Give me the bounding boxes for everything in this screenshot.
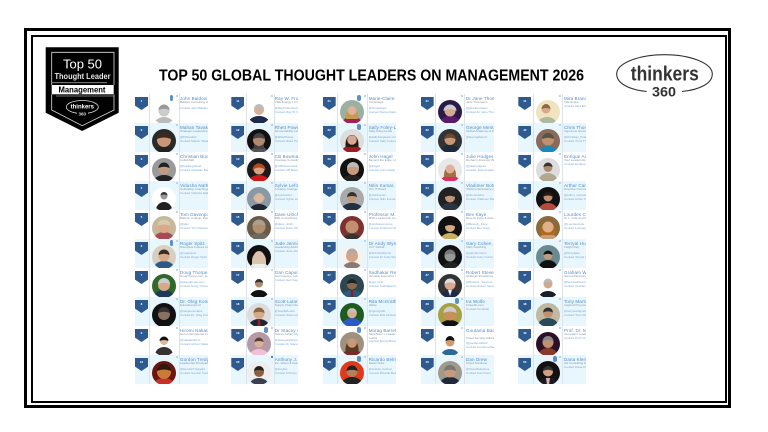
row: Sylvie Lefoir: 14 [236, 186, 239, 190]
row: Morag Barrett: Author [369, 336, 378, 340]
row: Scott Luton: 18 [236, 302, 239, 306]
row: Gordon Tredgold: @GordonTredgold [180, 367, 205, 371]
row: Dave Ulrich [231, 210, 298, 239]
column 1: ranks 1 to 10 [135, 94, 208, 384]
row: Dave Ulrich: @dave_ulrich [275, 222, 293, 226]
row: Mahan Tavakoli: @MTavakoli [180, 135, 196, 139]
row: Roger Spitz [135, 239, 208, 268]
row: Dr Jane Thomason: 31 [426, 99, 429, 103]
row: Rhett Power: @RhettPower [275, 135, 294, 139]
row: Doug Thorpe [135, 268, 208, 297]
row: Arthur Carmazzi [518, 181, 586, 210]
row: Morag Barrett [323, 326, 396, 355]
row: Anthony J. (Tony) Fox: 20 [236, 360, 239, 364]
row: Terryal Hu: @TerryalHu [564, 251, 580, 255]
row: Mira Brancu: Tiderscape [564, 100, 579, 104]
row: Mahan Tavakoli [135, 123, 208, 152]
row: Mahan Tavakoli: 2 [141, 128, 142, 132]
row: George Mentz [421, 123, 494, 152]
row: Sally Foley-Lewis [323, 123, 396, 152]
row: Dr. Oleg Konovalov [135, 297, 208, 326]
row: Roger Spitz: @rogerspitz [180, 251, 196, 255]
row: Christian Buckley: CollabTalk [180, 158, 194, 162]
row: Vidusha Nathavitharana: 4 [141, 186, 142, 190]
row: Ricardo Belmar: @ricardo_belmar [369, 367, 392, 371]
row: Gary Cohen: @garyburnison [466, 251, 486, 255]
row: Nitin Kumar, CFA: @nitinkumar [369, 193, 386, 197]
row: Sally Foley-Lewis: Sally Foley-Lewis [369, 129, 392, 133]
row: Sylvie Lefoir: @sylvielefoir [275, 193, 292, 197]
row: Enrique Accorsi: 43 [523, 157, 526, 161]
row: Ira Wolfe [421, 297, 494, 326]
column 2: ranks 11 to 20 [231, 94, 298, 384]
row: Doug Thorpe: 7 [141, 273, 142, 277]
row: Dan Drew [421, 355, 494, 384]
row: Rita McGrath: 28 [328, 302, 331, 306]
row: Ira Wolfe: LinkedIn.com [466, 303, 484, 307]
row: Ira Wolfe: 38 [426, 302, 429, 306]
row: Gari Capone: 17 [236, 273, 239, 277]
row: Ray W. Frohnhoefer: VRE Energy LLC [275, 100, 298, 104]
row: Nitin Kumar, CFA: The IT Board [369, 187, 386, 191]
row: Robert Stevens: @RobertL_Stevens [466, 280, 492, 284]
row: Dr. Oleg Konovalov: Educational Ltd [180, 303, 201, 307]
row: Rhett Power: 12 [236, 128, 239, 132]
row: Nitin Kumar, CFA [323, 181, 396, 210]
row: Gordon Tredgold: 10 [140, 360, 143, 364]
row: George Mentz: @GeorgeMentz [466, 135, 487, 139]
row: Julie Hodges: Contact Julie Hodges [466, 168, 494, 172]
row: Bev Kaye [421, 210, 494, 239]
row: John Hagel: John Hagel [369, 154, 393, 159]
row: John Hagel: Contact John Hagel [369, 168, 395, 172]
row: Ricardo Belmar: Retail Voice [369, 361, 385, 365]
row: Scott Luton: Scott Luton [275, 299, 298, 304]
logo: thinkers 360: thinkers [631, 62, 699, 86]
column 4: ranks 31 to 40 [421, 94, 494, 384]
row: Chris Thomas: 42 [523, 128, 526, 132]
row: Rhett Power [231, 123, 298, 152]
row: Ricardo Belmar [323, 355, 396, 384]
row: Scott Luton [231, 297, 298, 326]
row: Vladimer Botsvadze [421, 181, 494, 210]
row: Tony Martignetti [518, 297, 586, 326]
row: Terryal Hu: Insight Day [564, 245, 579, 249]
badge: Top 50 Thought Leader: Thought Leader [54, 72, 110, 81]
row: Dr. Oleg Konovalov: @olegkonovalov [180, 309, 202, 313]
logo: thinkers 360: 360 [652, 84, 676, 100]
row: John Baldoni: Contact John Baldoni [180, 106, 208, 110]
row: Goutama Bachtiar [421, 326, 494, 355]
row: Bev Kaye: Contact Bev Kaye [466, 226, 490, 230]
row: Sylvie Lefoir [231, 181, 298, 210]
row: Rita McGrath: Valize [369, 303, 377, 307]
row: George Mentz: 32 [426, 128, 429, 132]
row: Bev Kaye: Bev Kaye [466, 212, 486, 217]
row: Roger Spitz: Contact Roger Spitz [180, 255, 207, 259]
row: Dan Drew: Cloud Solutions [466, 361, 487, 365]
row: Gary Cohen [421, 239, 494, 268]
row: Jude Jennison [231, 239, 298, 268]
row: Arthur Carmazzi: 44 [523, 186, 526, 190]
column 5: ranks 41 to 50 [518, 94, 586, 384]
row: Christian Buckley: @buckleyplanet [180, 164, 201, 168]
row: Goutama Bachtiar: @goutama2020 [466, 341, 487, 345]
row: Sudhakar Redd [323, 268, 396, 297]
row: Dr Jane Thomason [421, 94, 494, 123]
row: Rhett Power: Accountability Inc. [275, 129, 298, 133]
row: Ira Wolfe: Ira Wolfe [466, 299, 485, 304]
row: Roger Spitz: Roger Spitz [180, 241, 205, 246]
row: Ray W. Frohnhoefer: 11 [236, 99, 239, 103]
row: Dan Drew: Dan Drew [466, 357, 487, 362]
row: Prof. Dr. Marc [518, 326, 586, 355]
row: John Hagel: @jhagel [369, 164, 380, 168]
row: Rita McGrath: Rita McGrath [369, 299, 396, 304]
row: Tony Martignetti: 48 [523, 302, 526, 306]
row: Anthony J. (Tony) Fox: @tonyfox [275, 367, 288, 371]
row: Doug Thorpe: @dougthorpe.com [180, 280, 205, 284]
row: John Baldoni [135, 94, 208, 123]
row: Nitin Kumar, CFA: 24 [328, 186, 331, 190]
row: CB Bowman-Ottomanelli: @CBOttomanelli [275, 164, 297, 168]
row: Julie Hodges [421, 152, 494, 181]
row: John Baldoni: 1 [141, 99, 142, 103]
row: Dr Jane Thomason: @janethomason [466, 106, 488, 110]
row: Tom Davenport [135, 210, 208, 239]
row: Hiromi Nakatani [135, 326, 208, 355]
row: Robert Stevens: 37 [426, 273, 429, 277]
row: Marie-Claire Ross: 21 [328, 99, 331, 103]
row: Bev Kaye: @Beverly_Kaye [466, 222, 488, 226]
row: Sudhakar Redd: 27 [328, 273, 331, 277]
logo: thinkers 360 [616, 54, 713, 100]
row: Terryal Hu [518, 239, 586, 268]
row: Dave Ulrich: 15 [236, 215, 239, 219]
row: Dr Andy Wynne: @DrAndyWynne [369, 251, 391, 255]
row: Marie-Claire Ross: Trustologie [369, 100, 383, 104]
badge: Top 50 Thought Leader: Management [58, 86, 106, 94]
row: Dan Drew: 40 [426, 360, 429, 364]
row: Graham Wilson: Secure2Security [564, 274, 586, 278]
badge: Top 50 Thought Leader: 360 [79, 112, 87, 116]
row: John Baldoni: John Baldoni [180, 96, 207, 101]
row: Graham Wilson: 47 [523, 273, 526, 277]
row: Dana Kleman [518, 355, 586, 384]
row: Dan Drew: @CloudSolutions [466, 367, 489, 371]
row: CB Bowman-Ottomanelli: 13 [236, 157, 239, 161]
row: Dr Andy Wynne: CVY Global [369, 245, 384, 249]
badge: Top 50 Thought Leader: Top 50 [63, 56, 102, 72]
row: Enrique Accorsi [518, 152, 586, 181]
row: Julie Hodges: @juliehodges2 [466, 164, 486, 168]
row: Bev Kaye: 35 [426, 215, 429, 219]
row: Gary Cohen: CEO Coaching [466, 245, 486, 249]
row: Tom Davenport: 5 [141, 215, 142, 219]
row: Hiromi Nakatani: @nakatanihero [180, 338, 200, 342]
row: Gary Cohen: Gary Cohen [466, 241, 491, 246]
row: Ira Wolfe: Contact Ira Wolfe [466, 307, 489, 311]
row: Dan Drew: Contact Dan Drew [466, 371, 490, 375]
row: Marie-Claire Ross: @Trustologie [369, 106, 386, 110]
row: Gary Cohen: Contact Gary Cohen [466, 255, 493, 259]
row: Gari Capone [231, 268, 298, 297]
row: Dr Stacey Ashley: 19 [236, 331, 239, 335]
row: Prof. Dr. Marc: 49 [523, 331, 526, 335]
row: Vladimer Botsvadze: @vbotsvadze [466, 193, 484, 197]
row: Professor M.S. Rao: @professormsrao [369, 222, 393, 226]
row: Tom Davenport: @tdav [180, 222, 189, 226]
badge: Top 50 Thought Leader [46, 47, 119, 131]
row: Ricardo Belmar: 30 [328, 360, 331, 364]
row: Rita McGrath [323, 297, 396, 326]
row: Christian Buckley [135, 152, 208, 181]
row: CB Bowman-Ottomanelli [231, 152, 298, 181]
row: Dr Andy Wynne [323, 239, 396, 268]
row: Mira Brancu: 41 [523, 99, 526, 103]
row: Dr Andy Wynne: 26 [328, 244, 331, 248]
row: Morag Barrett: 29 [328, 331, 331, 335]
row: Vidusha Nathavitharana [135, 181, 208, 210]
row: Roger Spitz: 6 [141, 244, 142, 248]
badge: Top 50 Thought Leader: thinkers [71, 104, 95, 110]
row: Gordon Tredgold [135, 355, 208, 384]
row: Professor M.S. Rao: 25 [328, 215, 331, 219]
row: Graham Wilson [518, 268, 586, 297]
row: John Hagel [323, 152, 396, 181]
row: Ray W. Frohnhoefer [231, 94, 298, 123]
row: Robert Stevens [421, 268, 494, 297]
row: Dr Stacey Ashley: Stacey Ashley Pty [275, 332, 298, 336]
row: Lourdes Cooper [518, 210, 586, 239]
row: Marie-Claire Ross [323, 94, 396, 123]
row: Goutama Bachtiar: 39 [426, 331, 429, 335]
row: Anthony J. (Tony) Fox [231, 355, 298, 384]
row: Scott Luton: @ScottWLuton [275, 309, 295, 313]
row: Hiromi Nakatani: 9 [141, 331, 142, 335]
row: Rita McGrath: @rgmcgrath [369, 309, 385, 313]
row: Chris Thomas [518, 123, 586, 152]
row: Dr. Oleg Konovalov: 8 [141, 302, 142, 306]
row: Sudhakar Redd: @get.CXO [369, 280, 383, 284]
row: Dr Stacey Ashley [231, 326, 298, 355]
row: Julie Hodges: 33 [426, 157, 429, 161]
row: Lourdes Cooper: @LourdesCole [564, 222, 584, 226]
row: Gary Cohen: 36 [426, 244, 429, 248]
row: Sally Foley-Lewis: 22 [328, 128, 331, 132]
row: Mira Brancu [518, 94, 586, 123]
row: Dana Kleman: 50 [523, 360, 526, 364]
row: Julie Hodges: Julie Hodges [466, 154, 493, 159]
inner frame [30, 35, 727, 403]
row: Professor M.S. Rao [323, 210, 396, 239]
row: Christian Buckley: 3 [141, 157, 142, 161]
column 3: ranks 21 to 30 [323, 94, 396, 384]
row: Dr Jane Thomason: Jane Thomason [466, 100, 487, 104]
row: Jude Jennison: 16 [236, 244, 239, 248]
row: Lourdes Cooper: 45 [523, 215, 526, 219]
row: John Hagel: 23 [328, 157, 331, 161]
row: Terryal Hu: 46 [523, 244, 526, 248]
row: Vladimer Botsvadze: 34 [426, 186, 429, 190]
